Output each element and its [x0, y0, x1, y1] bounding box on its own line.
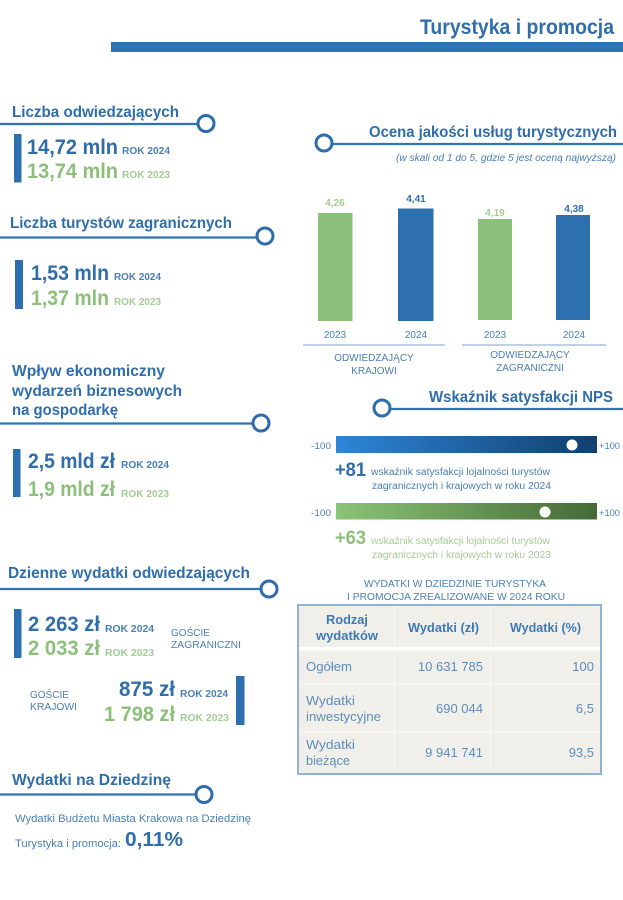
value: visitors 2024: 14,72 mln [27, 136, 118, 159]
label: domestic guests: GOŚCIE [30, 688, 69, 701]
result: NPS 2024 [335, 460, 551, 492]
value: foreign guests 2023: ROK 2023 [105, 648, 154, 659]
heading: economic impact: na gospodarkę [12, 402, 118, 419]
panel: service quality [303, 124, 623, 377]
value: visitors 2023: 13,74 mln [27, 160, 118, 183]
bar: domestic 2024 [398, 194, 434, 341]
accent bar: domestic guests [236, 676, 244, 725]
heading: daily spending: Dzienne wydatki odwiedzających [8, 565, 250, 582]
value: foreign tourists 2024: ROK 2024 [114, 272, 161, 283]
bar: domestic 2023 [318, 198, 352, 341]
bar: foreign 2023: 2023 [484, 330, 507, 341]
value: foreign guests 2023 [28, 637, 154, 660]
value: visitors 2023 [27, 160, 170, 183]
row: current: bieżące [306, 753, 350, 768]
accent bar: economic impact [13, 449, 20, 497]
group label: foreign: ZAGRANICZNI [496, 363, 564, 374]
table title [347, 579, 565, 603]
gauge: NPS 2023: -100 [311, 508, 331, 518]
value: foreign guests 2023: 2 033 zł [28, 637, 100, 660]
table title: I PROMOCJA ZREALIZOWANE W 2024 ROKU [347, 592, 565, 603]
value: foreign guests 2024: 2 263 zł [28, 613, 100, 636]
value: domestic guests 2024: 875 zł [119, 678, 175, 701]
panel: visitors [0, 104, 214, 183]
value: domestic guests 2023: 1 798 zł [104, 703, 175, 726]
heading: spending on the field: Wydatki na Dziedzinę [12, 772, 171, 789]
result: NPS 2023: zagranicznych i krajowych w roku 2023 [372, 550, 551, 561]
value: visitors 2024: ROK 2024 [122, 146, 170, 157]
bar: foreign 2023 [478, 208, 512, 341]
label: foreign guests: ZAGRANICZNI [171, 640, 241, 651]
row: total: Ogółem [306, 659, 352, 674]
connector: economic impact [0, 415, 269, 431]
heading: NPS: Wskaźnik satysfakcji NPS [429, 389, 613, 406]
bar: foreign 2024: 2024 [563, 330, 586, 341]
table header: Rodzaj [326, 612, 368, 627]
value: visitors 2024 [27, 136, 170, 159]
description: Wydatki Budżetu Miasta Krakowa na Dziedzinę [15, 813, 251, 825]
value: economic impact 2023: ROK 2023 [121, 489, 169, 500]
share value [15, 829, 183, 851]
bar: domestic 2023: 4,26 [325, 198, 345, 209]
accent bar: visitors [14, 134, 22, 182]
bar: domestic 2023: 2023 [324, 330, 347, 341]
table [298, 605, 601, 774]
group label: foreign: ODWIEDZAJĄCY [490, 350, 570, 361]
bar: foreign 2023: 4,19 [485, 208, 505, 219]
row: investment [306, 693, 594, 724]
value: economic impact 2023: 1,9 mld zł [28, 478, 115, 501]
label: foreign guests [171, 626, 241, 651]
accent bar: foreign tourists [15, 260, 23, 309]
heading: economic impact [11, 363, 182, 419]
row: investment: 6,5 [576, 701, 594, 716]
value: foreign guests 2024 [28, 613, 154, 636]
row: investment: Wydatki [306, 693, 355, 708]
panel: spending on the field [0, 772, 251, 851]
table header: Wydatki (%) [510, 620, 581, 635]
row: investment: 690 044 [436, 701, 483, 716]
row: current: 9 941 741 [425, 745, 483, 760]
value: domestic guests 2024 [119, 678, 228, 701]
page header [111, 16, 623, 52]
result: NPS 2024: wskaźnik satysfakcji lojalności turystów [370, 467, 551, 478]
row: total: 10 631 785 [418, 659, 483, 674]
table header: wydatków [315, 628, 379, 643]
value: economic impact 2024: 2,5 mld zł [28, 450, 115, 473]
panel: economic impact [0, 363, 269, 501]
row: current: Wydatki [306, 737, 355, 752]
connector: foreign tourists [0, 228, 273, 244]
share value: Turystyka i promocja: [15, 838, 121, 850]
bar: foreign 2024: 4,38 [564, 204, 584, 215]
value: economic impact 2024 [28, 450, 169, 473]
label: foreign guests: GOŚCIE [171, 626, 210, 639]
result: NPS 2023 [335, 528, 551, 561]
group label: domestic: ODWIEDZAJĄCY [334, 353, 414, 364]
gauge: NPS 2023: +100 [599, 508, 620, 518]
bar chart [303, 194, 606, 377]
connector: daily spending [0, 581, 277, 597]
value: economic impact 2023 [28, 478, 169, 501]
group label: foreign [462, 345, 606, 374]
table header: Wydatki (zł) [408, 620, 479, 635]
table header [315, 612, 581, 643]
row: total [306, 659, 594, 674]
value: foreign tourists 2023: ROK 2023 [114, 297, 161, 308]
group label: domestic: KRAJOWI [351, 366, 397, 377]
bar: domestic 2024: 2024 [405, 330, 428, 341]
value: domestic guests 2024: ROK 2024 [180, 689, 228, 700]
value: foreign guests 2024: ROK 2024 [105, 624, 154, 635]
connector: visitors [0, 116, 214, 132]
gauge: NPS 2024: -100 [311, 441, 331, 451]
value: economic impact 2024: ROK 2024 [121, 460, 169, 471]
value: foreign tourists 2024 [31, 262, 161, 285]
group label: domestic [303, 345, 445, 377]
gauge: NPS 2023 [311, 503, 620, 520]
panel: NPS [311, 389, 623, 561]
result: NPS 2023: +63 [335, 528, 366, 549]
result: NPS 2024: zagranicznych i krajowych w roku 2024 [372, 481, 551, 492]
table title: WYDATKI W DZIEDZINIE TURYSTYKA [364, 579, 546, 590]
value: domestic guests 2023 [104, 703, 229, 726]
header bar [111, 42, 623, 52]
panel: daily spending [0, 565, 277, 726]
bar: domestic 2024: 4,41 [406, 194, 426, 205]
heading: economic impact: wydarzeń biznesowych [11, 383, 182, 400]
accent bar: foreign guests [14, 609, 22, 658]
bar: foreign 2024 [556, 204, 590, 341]
value: visitors 2023: ROK 2023 [122, 170, 170, 181]
value: foreign tourists 2024: 1,53 mln [31, 262, 109, 285]
share value: 0,11% [125, 829, 183, 851]
panel: spending table [298, 579, 601, 774]
label: domestic guests [30, 688, 77, 713]
row: current: 93,5 [569, 745, 594, 760]
heading: economic impact: Wpływ ekonomiczny [12, 363, 165, 380]
connector: spending on the field [0, 786, 212, 802]
gauge: NPS 2024: +100 [599, 441, 620, 451]
panel: foreign tourists [0, 215, 273, 310]
value: domestic guests 2023: ROK 2023 [180, 713, 229, 724]
result: NPS 2024: +81 [335, 460, 366, 481]
connector: service quality [316, 135, 623, 151]
gauge: NPS 2024 [311, 436, 620, 453]
connector: NPS [374, 400, 623, 416]
heading: visitors: Liczba odwiedzających [12, 104, 179, 121]
subtitle: (w skali od 1 do 5, gdzie 5 jest oceną najwyższą) [396, 153, 616, 164]
value: foreign tourists 2023: 1,37 mln [31, 287, 109, 310]
row: current [306, 737, 594, 768]
row: investment: inwestycyjne [306, 709, 381, 724]
heading: foreign tourists: Liczba turystów zagranicznych [10, 215, 232, 232]
value: foreign tourists 2023 [31, 287, 161, 310]
result: NPS 2023: wskaźnik satysfakcji lojalności turystów [370, 536, 551, 547]
row: total: 100 [572, 659, 594, 674]
label: domestic guests: KRAJOWI [30, 702, 77, 713]
